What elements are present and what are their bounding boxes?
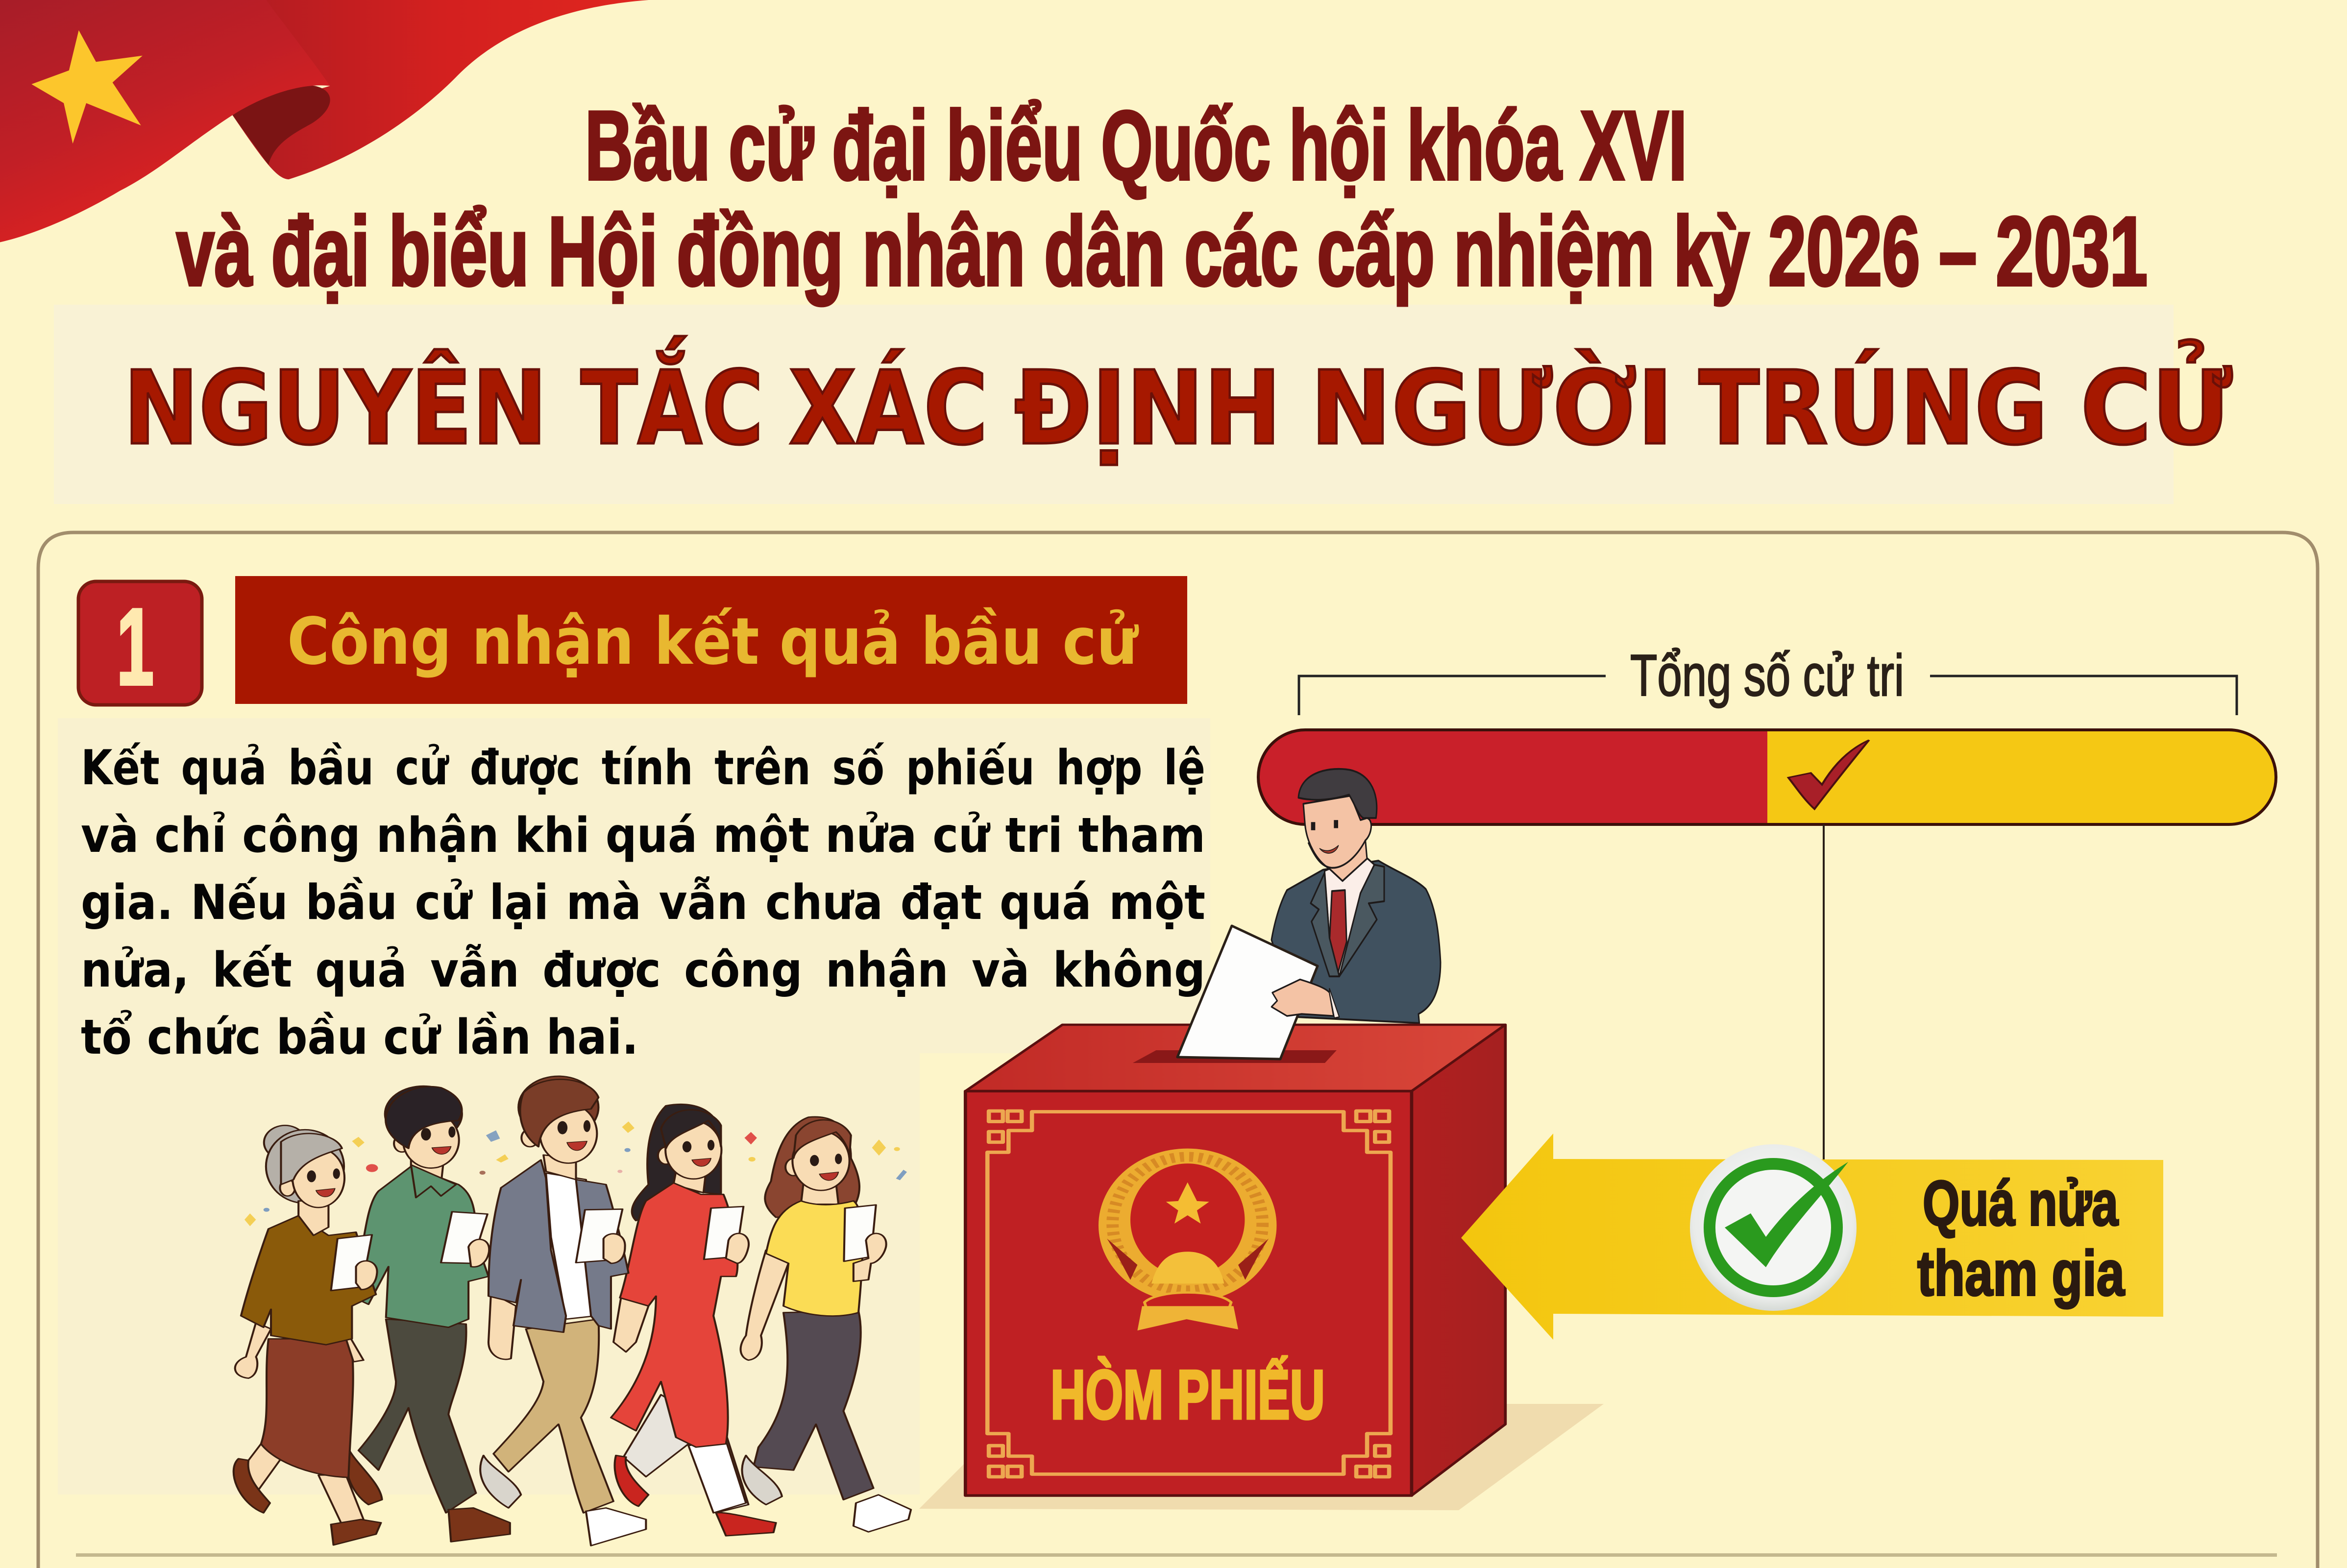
label line one: Quá nửa [1923, 1167, 2119, 1239]
body paragraph: và chỉ công nhận khi quá một nửa cử tri tham [81, 807, 1205, 863]
voter suit [1271, 861, 1441, 1023]
emblem wreath texture [1113, 1157, 1263, 1290]
bar red part [1258, 730, 1767, 824]
heading text: Công nhận kết quả bầu cử [287, 604, 1139, 679]
voter shirt [1324, 857, 1374, 976]
box ornamental frame [987, 1111, 1391, 1477]
badge disc [1690, 1144, 1857, 1311]
total voters bracket [1299, 643, 2237, 715]
green check badge [1690, 1144, 1857, 1311]
turnout label [1917, 1167, 2125, 1309]
box front [965, 1091, 1412, 1496]
emblem gear [1151, 1252, 1224, 1283]
main title: CỬ [2080, 339, 2232, 467]
connector line [1823, 824, 1825, 1162]
main title: ĐỊNH [1014, 349, 1281, 467]
box floor shadow [919, 1404, 1604, 1510]
emblem wreath [1099, 1149, 1276, 1303]
ballot paper [1177, 926, 1318, 1059]
yellow arrow [1461, 1134, 2163, 1340]
election subtitle [176, 91, 2148, 306]
box slot [1133, 1050, 1337, 1063]
badge tick [1725, 1162, 1848, 1267]
main title [123, 336, 2232, 467]
label line two: tham gia [1917, 1237, 2125, 1309]
voter hand [1271, 979, 1339, 1018]
text and people backing [58, 718, 1210, 1495]
voter three: grey jacket [480, 1076, 646, 1545]
body paragraph: gia. Nếu bầu cử lại mà vẫn chưa đạt quá một [81, 875, 1205, 931]
main title: NGƯỜI [1310, 349, 1673, 467]
number badge [78, 581, 202, 708]
bracket label: Tổng số cử tri [1630, 643, 1904, 708]
voter four: red ao dai [611, 1104, 776, 1536]
bottom divider [76, 1553, 2277, 1557]
flag front band [0, 0, 330, 242]
main title: NGUYÊN [123, 349, 547, 467]
subtitle line one: Bầu cử đại biểu Quốc hội khóa XVI [585, 91, 1687, 200]
badge number: 1 [117, 586, 154, 708]
voter at ballot box [1271, 769, 1441, 1023]
main title: TRÚNG [1699, 349, 2048, 467]
title backing panel [54, 305, 2174, 504]
flag back band [232, 0, 649, 179]
national emblem [1099, 1149, 1276, 1330]
voter one: grandmother [234, 1125, 381, 1545]
voter lapel [1311, 865, 1384, 976]
emblem side ribbons [1107, 1238, 1269, 1280]
main title: XÁC [789, 349, 988, 467]
emblem star [1166, 1182, 1209, 1224]
body paragraph: nửa, kết quả vẫn được công nhận và không [81, 942, 1205, 998]
box side [1412, 1025, 1505, 1496]
voter neck and face [1303, 796, 1371, 881]
section heading [235, 576, 1187, 704]
voter smile [1320, 845, 1339, 853]
turnout bar [1258, 730, 2276, 824]
voters group [234, 1076, 911, 1545]
voter eyes [1313, 820, 1336, 830]
flag fold shadow [232, 85, 330, 165]
main title: TẮC [581, 336, 763, 467]
body paragraph: tổ chức bầu cử lần hai. [81, 1010, 638, 1065]
body paragraph: Kết quả bầu cử được tính trên số phiếu hợp lệ [81, 740, 1205, 796]
badge ring [1710, 1164, 1837, 1291]
emblem lower red band [1145, 1293, 1231, 1309]
flag ribbon [0, 0, 649, 242]
voter tie [1329, 890, 1346, 974]
content panel outline [38, 532, 2318, 1568]
heading banner [235, 576, 1187, 704]
voter two: green shirt [346, 1086, 510, 1542]
bar outline [1258, 730, 2276, 824]
voter hair [1298, 769, 1377, 818]
bar check mark [1788, 740, 1869, 809]
badge box [78, 581, 202, 705]
voter five: yellow shirt [741, 1117, 911, 1532]
confetti [244, 1121, 907, 1226]
bracket lines [1299, 676, 2237, 715]
body paragraph [81, 740, 1205, 1065]
box top [965, 1025, 1505, 1091]
flag star [31, 30, 143, 144]
emblem banner [1137, 1306, 1238, 1330]
ballot box [965, 1025, 1505, 1496]
bar yellow part [1767, 730, 2276, 824]
box label: HÒM PHIẾU [1051, 1355, 1325, 1434]
emblem red field [1130, 1163, 1245, 1276]
